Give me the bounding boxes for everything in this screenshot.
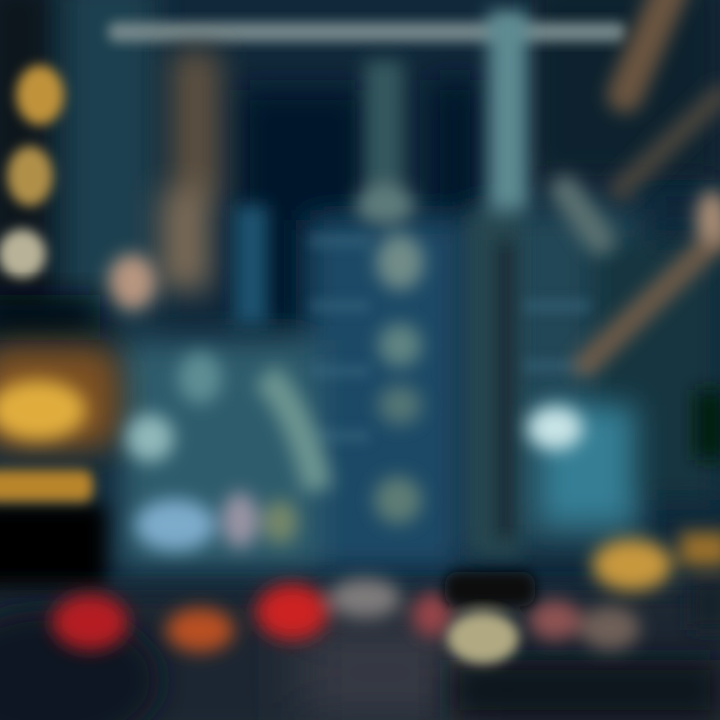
tower floor bands xyxy=(310,235,590,442)
left gold lights xyxy=(0,65,64,279)
peach light xyxy=(108,190,720,310)
right gold shop lights xyxy=(592,532,720,630)
blue accent column xyxy=(234,205,268,325)
traffic lights xyxy=(52,578,640,652)
left storefront xyxy=(0,295,120,595)
central grey-teal towers xyxy=(355,10,528,555)
title band xyxy=(108,22,626,42)
background towers xyxy=(0,0,720,570)
brown column xyxy=(160,50,220,290)
top-right diagonal beams xyxy=(565,0,720,365)
car xyxy=(445,572,535,664)
pale teal window glows xyxy=(126,352,318,551)
right teal glow xyxy=(527,390,720,525)
street bottom xyxy=(0,590,720,720)
